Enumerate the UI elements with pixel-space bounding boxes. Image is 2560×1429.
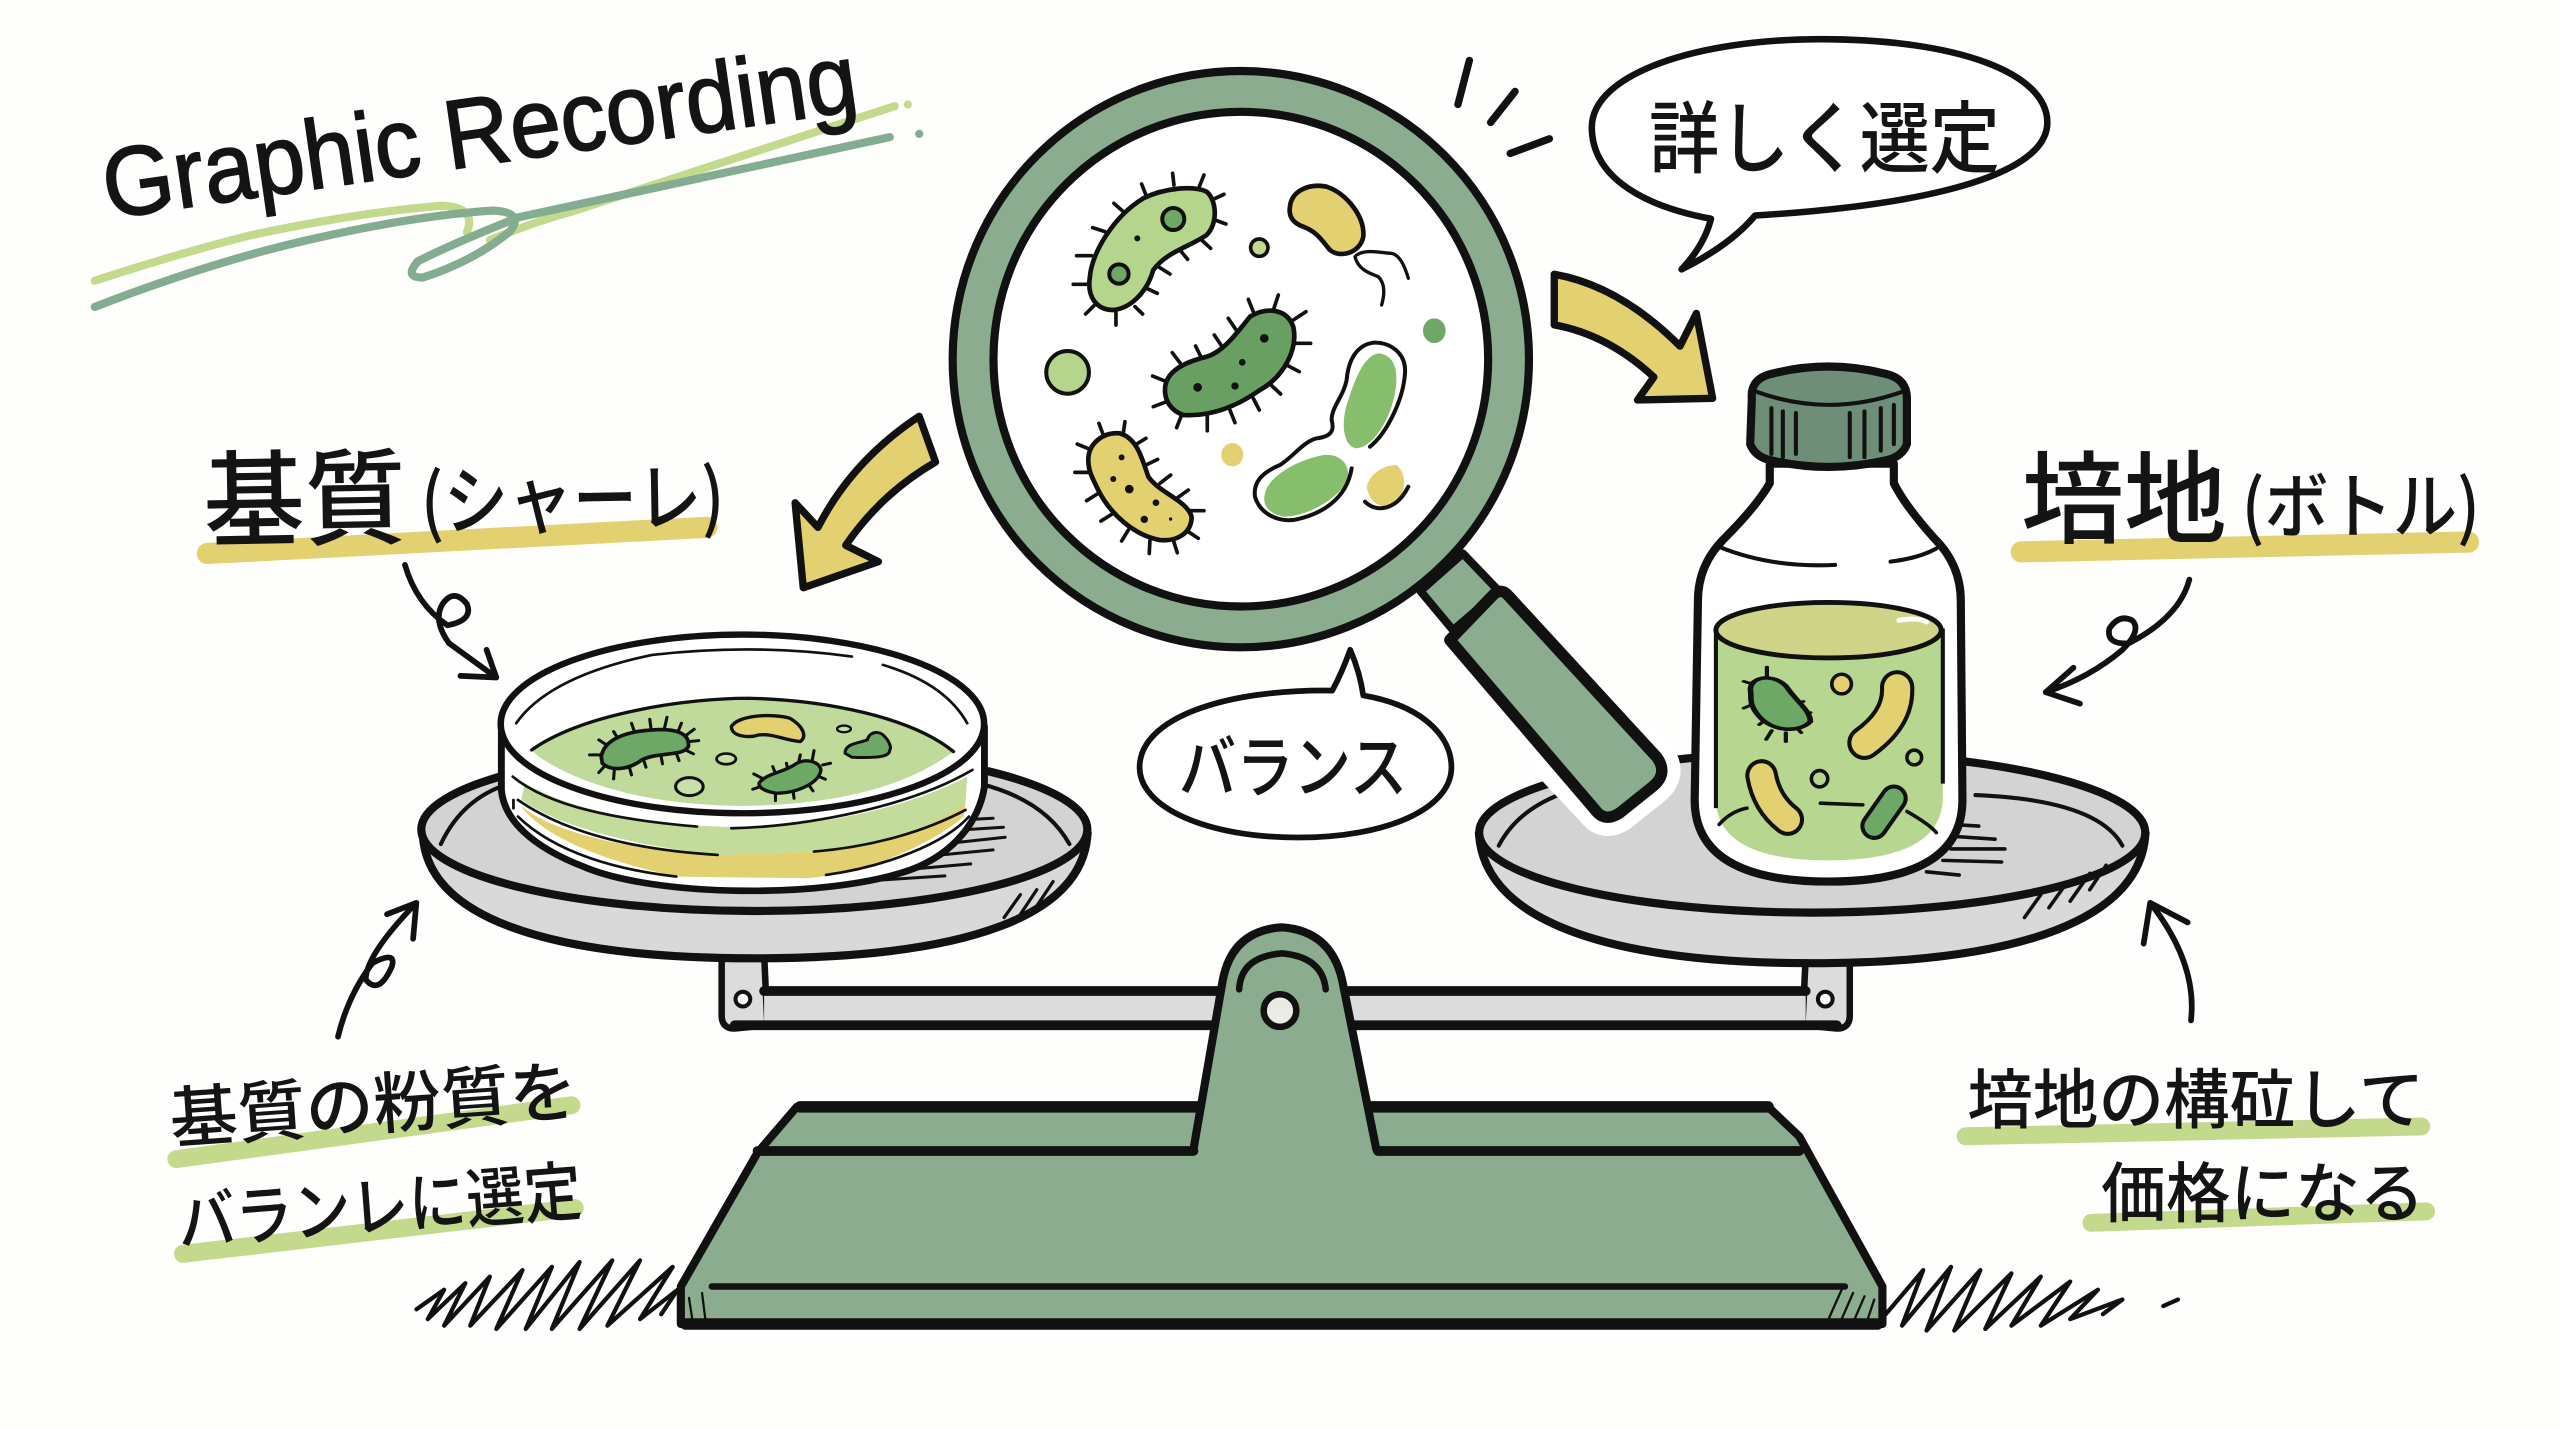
title underlines (95, 100, 923, 307)
petri dish (501, 635, 1005, 891)
arrow: to bottle (1554, 274, 1713, 400)
callout text line 1: 培地の構砬して (1967, 1047, 2424, 1142)
callout: right (1966, 1047, 2426, 1235)
right pan (1479, 753, 2145, 963)
dish hatch shadow (883, 818, 1005, 880)
magnifier neck (1420, 553, 1499, 630)
bacterium yellow spotted (1075, 422, 1204, 553)
magnifier ring (973, 91, 1509, 627)
dish layer lines (513, 770, 972, 877)
dish yellow layer (520, 802, 966, 878)
speech bubble: 詳しく選定 (1592, 39, 2047, 269)
heading text: ボトル: (ボトル) (2242, 449, 2480, 553)
heading text: 培地: 培地 (2021, 419, 2227, 565)
dish base (501, 727, 984, 891)
callout highlights (1966, 1126, 2426, 1223)
heading text: シャーレ: (シャーレ) (420, 437, 725, 551)
dish green layer (521, 777, 967, 855)
bacteria dividing (1255, 343, 1408, 520)
lens bacteria (1046, 173, 1446, 553)
heading highlight (207, 527, 707, 553)
speech bubble: 詳しく選定: 詳しく選定 (1649, 76, 2000, 190)
scale (681, 927, 1882, 1324)
bottle bacterium with hairs (1744, 667, 1810, 742)
dish lid (501, 635, 984, 813)
heading: 基質(シャーレ) (202, 415, 725, 570)
callout text line 2: 価格になる (2101, 1140, 2424, 1235)
bottle cap (1750, 367, 1907, 467)
bottle bacteria (1762, 674, 1922, 826)
lid highlights (516, 649, 967, 723)
bacterium light green (1073, 173, 1226, 325)
heading highlight (2021, 542, 2469, 552)
curly arrow: heading to dish (405, 565, 496, 678)
bacterium yellow with flagella (1290, 186, 1408, 305)
curly arrow: heading to bottle (2046, 580, 2189, 704)
bacterium dark green (1153, 295, 1311, 431)
glass highlights (1719, 547, 1936, 565)
title: Graphic Recording (95, 22, 923, 307)
magnifier (973, 91, 1509, 630)
callout text line 2: バランレに選定 (174, 1138, 585, 1265)
callout text line 1: 基質の粉質を (166, 1038, 580, 1163)
handle halo (1543, 735, 1662, 817)
handle body (1450, 591, 1662, 817)
dish bacterium large (590, 717, 699, 779)
beam (764, 991, 1806, 1025)
heading text: 基質: 基質 (202, 415, 407, 570)
title text: Graphic Recording (95, 22, 864, 240)
speech bubble: バランス: バランス (1179, 712, 1407, 812)
sparkle lines (1458, 60, 1549, 153)
liquid (1716, 629, 1943, 860)
callout highlights (176, 1105, 575, 1254)
dish bacterium small (753, 751, 831, 801)
base lines (758, 1148, 1799, 1154)
post (1193, 927, 1376, 1149)
bottle (1695, 367, 1962, 882)
small cells (1046, 239, 1446, 466)
arrow: right callout to pan (2144, 903, 2192, 1020)
base shading (689, 1290, 1874, 1319)
agar (532, 698, 953, 806)
pivot (1264, 994, 1296, 1027)
dish bacterium yellow (731, 716, 804, 742)
hatch marks under base (416, 1260, 2178, 1331)
magnifier handle (1450, 591, 1662, 817)
dish blobs (676, 726, 890, 796)
speech bubble: バランス (1140, 650, 1451, 838)
arrow: to dish (795, 416, 936, 588)
heading: 培地(ボトル) (2021, 419, 2480, 565)
callout: left (166, 1038, 585, 1265)
base (681, 1107, 1882, 1324)
bottle glass (1695, 464, 1962, 882)
left pan (421, 748, 1087, 958)
beam brackets (722, 953, 767, 1029)
arrow: left callout to pan (338, 903, 416, 1037)
